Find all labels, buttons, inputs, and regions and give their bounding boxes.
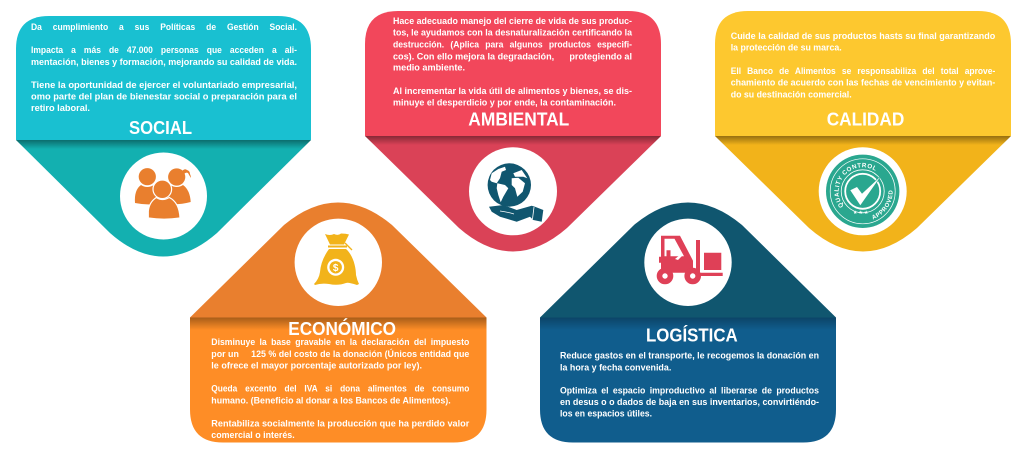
logistica body text: los en espacios útiles. xyxy=(560,409,652,419)
economico body text: humano. (Beneficio al donar a los Bancos de Alimentos). xyxy=(211,395,451,405)
icon: people group xyxy=(120,152,207,240)
ambiental body text: destrucción. (Aplica para algunos productos especifi- xyxy=(393,40,632,50)
ambiental body text: Al incrementar la vida útil de alimentos y bienes, se dis- xyxy=(393,86,632,96)
icon: money bag xyxy=(295,219,382,306)
social heading: SOCIAL xyxy=(129,117,192,138)
ambiental body text: medio ambiente. xyxy=(393,63,465,73)
icon: money bag: $ xyxy=(333,263,339,274)
calidad body text: Cuide la calidad de sus productos hasts su final garantizando xyxy=(731,31,996,41)
economico body text xyxy=(211,337,470,440)
calidad body text: la protección de su marca. xyxy=(731,43,842,53)
social pointed tab xyxy=(16,140,311,256)
icon: forklift xyxy=(644,219,732,306)
ambiental text card xyxy=(365,11,661,136)
economico pointed tab xyxy=(190,202,486,318)
logistica heading: LOGÍSTICA xyxy=(646,325,738,346)
calidad body text: do su destinación comercial. xyxy=(731,89,852,99)
icon: quality control seal: APPROVED xyxy=(872,190,893,220)
logistica body text: Optimiza el espacio improductivo al liberarse de productos xyxy=(560,385,819,395)
economico body text: Queda excento del IVA si dona alimentos de consumo xyxy=(211,384,470,394)
social body text: omo parte del plan de bienestar social o preparación para el xyxy=(31,92,297,102)
economico body text: comercial o interés. xyxy=(211,430,295,440)
calidad body text xyxy=(731,31,996,99)
logistica pointed tab xyxy=(540,202,836,318)
panel: calidad xyxy=(715,11,1011,252)
social body text: Tiene la oportunidad de ejercer el voluntariado empresarial, xyxy=(31,80,297,90)
logistica body text xyxy=(560,350,819,419)
panel: economico xyxy=(190,202,486,442)
icon: quality control seal: ★★★ xyxy=(853,210,869,216)
logistica body text: Reduce gastos en el transporte, le recogemos la donación en xyxy=(560,350,819,360)
calidad text card xyxy=(715,11,1011,136)
ambiental body text: minuye el desperdicio y por ende, la contaminación. xyxy=(393,97,616,107)
social text card xyxy=(16,16,311,140)
social body text: Da cumplimiento a sus Políticas de Gestión Social. xyxy=(31,22,297,32)
calidad pointed tab xyxy=(715,136,1011,252)
economico heading: ECONÓMICO xyxy=(288,318,396,339)
social body text: Impacta a más de 47.000 personas que acceden a ali- xyxy=(31,45,297,55)
ambiental heading: AMBIENTAL xyxy=(468,108,569,129)
icon: globe on hand xyxy=(469,147,557,235)
calidad body text: Ell Banco de Alimentos se responsabiliza del total aprove- xyxy=(731,66,995,76)
social body text: retiro laboral. xyxy=(31,103,90,113)
logistica body text: la hora y fecha convenida. xyxy=(560,362,671,372)
ambiental pointed tab xyxy=(365,136,661,252)
panel: ambiental xyxy=(365,11,661,252)
ambiental body text xyxy=(393,16,633,107)
economico body text: Rentabiliza socialmente la producción que ha perdido valor xyxy=(211,419,470,429)
calidad heading: CALIDAD xyxy=(827,108,904,129)
panel: logistica xyxy=(540,202,836,442)
calidad body text: chamiento de acuerdo con las fechas de vencimiento y evitan- xyxy=(731,78,995,88)
economico body text: por un 125 % del costo de la donación (Únicos entidad que xyxy=(211,348,469,359)
social body text xyxy=(31,22,297,113)
economico text card xyxy=(190,318,486,442)
logistica body text: en desus o o dados de baja en sus inventarios, convirtiéndo- xyxy=(560,397,819,407)
ambiental body text: cos). Con ello mejora la degradación, protegiendo al xyxy=(393,51,632,61)
economico body text: Disminuye la base gravable en la declaración del impuesto xyxy=(211,337,470,347)
icon: quality control seal: QUALITY CONTROL xyxy=(834,162,876,208)
ambiental body text: tos, le ayudamos con la desnaturalización certificando la xyxy=(393,28,633,38)
panel: social xyxy=(16,16,311,256)
logistica text card xyxy=(540,318,836,442)
ambiental body text: Hace adecuado manejo del cierre de vida de sus produc- xyxy=(393,16,632,26)
economico body text: le ofrece el mayor porcentaje autorizado por ley). xyxy=(211,360,422,370)
social body text: mentación, bienes y formación, mejorando su calidad de vida. xyxy=(31,57,297,67)
icon: quality control seal xyxy=(818,147,907,236)
